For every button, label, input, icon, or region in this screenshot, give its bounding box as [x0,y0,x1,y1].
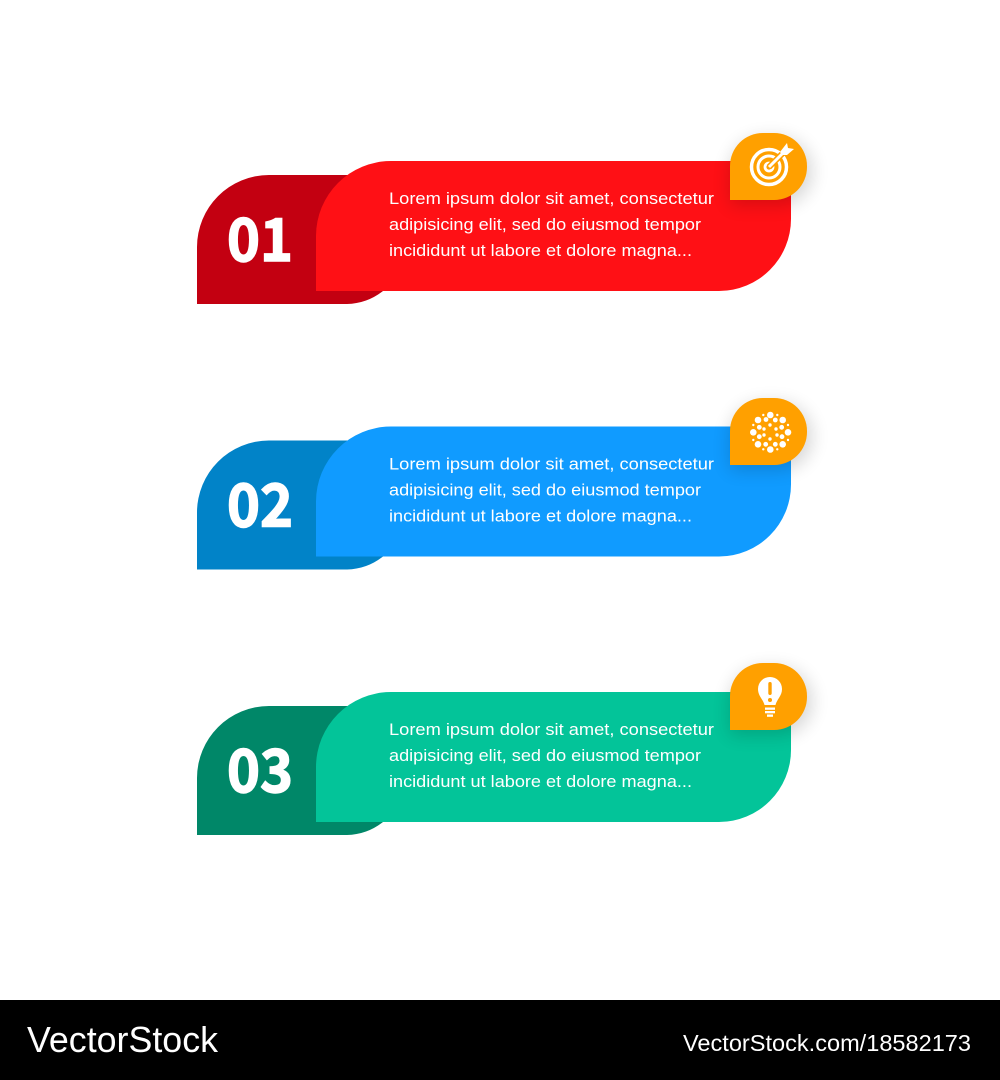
number tab 01 [197,175,400,304]
text banner 03 [316,692,791,822]
text banner 02 [316,426,791,556]
panel: item 03 [197,663,812,835]
text banner 02: Lorem ipsum dolor sit amet, consectetur [389,456,715,474]
number tab 01: 01 [227,193,293,278]
footer image id: VectorStock.com/18582173 [683,1030,971,1056]
text banner 01: Lorem ipsum dolor sit amet, consectetur [389,190,715,208]
number tab 02 [197,440,400,570]
footer logo: VectorStock [27,1019,219,1060]
icon: dot cluster badge [730,398,812,470]
text banner 03: adipisicing elit, sed do eiusmod tempor [389,747,702,765]
number tab 02: 02 [227,458,293,544]
text banner 02: adipisicing elit, sed do eiusmod tempor [389,482,702,500]
text banner 01: incididunt ut labore et dolore magna... [389,242,692,260]
footer bar [0,1000,1000,1080]
text banner 03: incididunt ut labore et dolore magna... [389,773,692,791]
text banner 01: adipisicing elit, sed do eiusmod tempor [389,216,702,234]
panel: item 02 [197,398,812,570]
text banner 02: incididunt ut labore et dolore magna... [389,508,692,526]
number tab 03 [197,706,400,835]
panel: item 01 [197,133,812,304]
icon: target badge [730,133,812,205]
number tab 03: 03 [227,724,293,809]
icon: light bulb badge [730,663,812,735]
text banner 03: Lorem ipsum dolor sit amet, consectetur [389,721,715,739]
text banner 01 [316,161,791,291]
